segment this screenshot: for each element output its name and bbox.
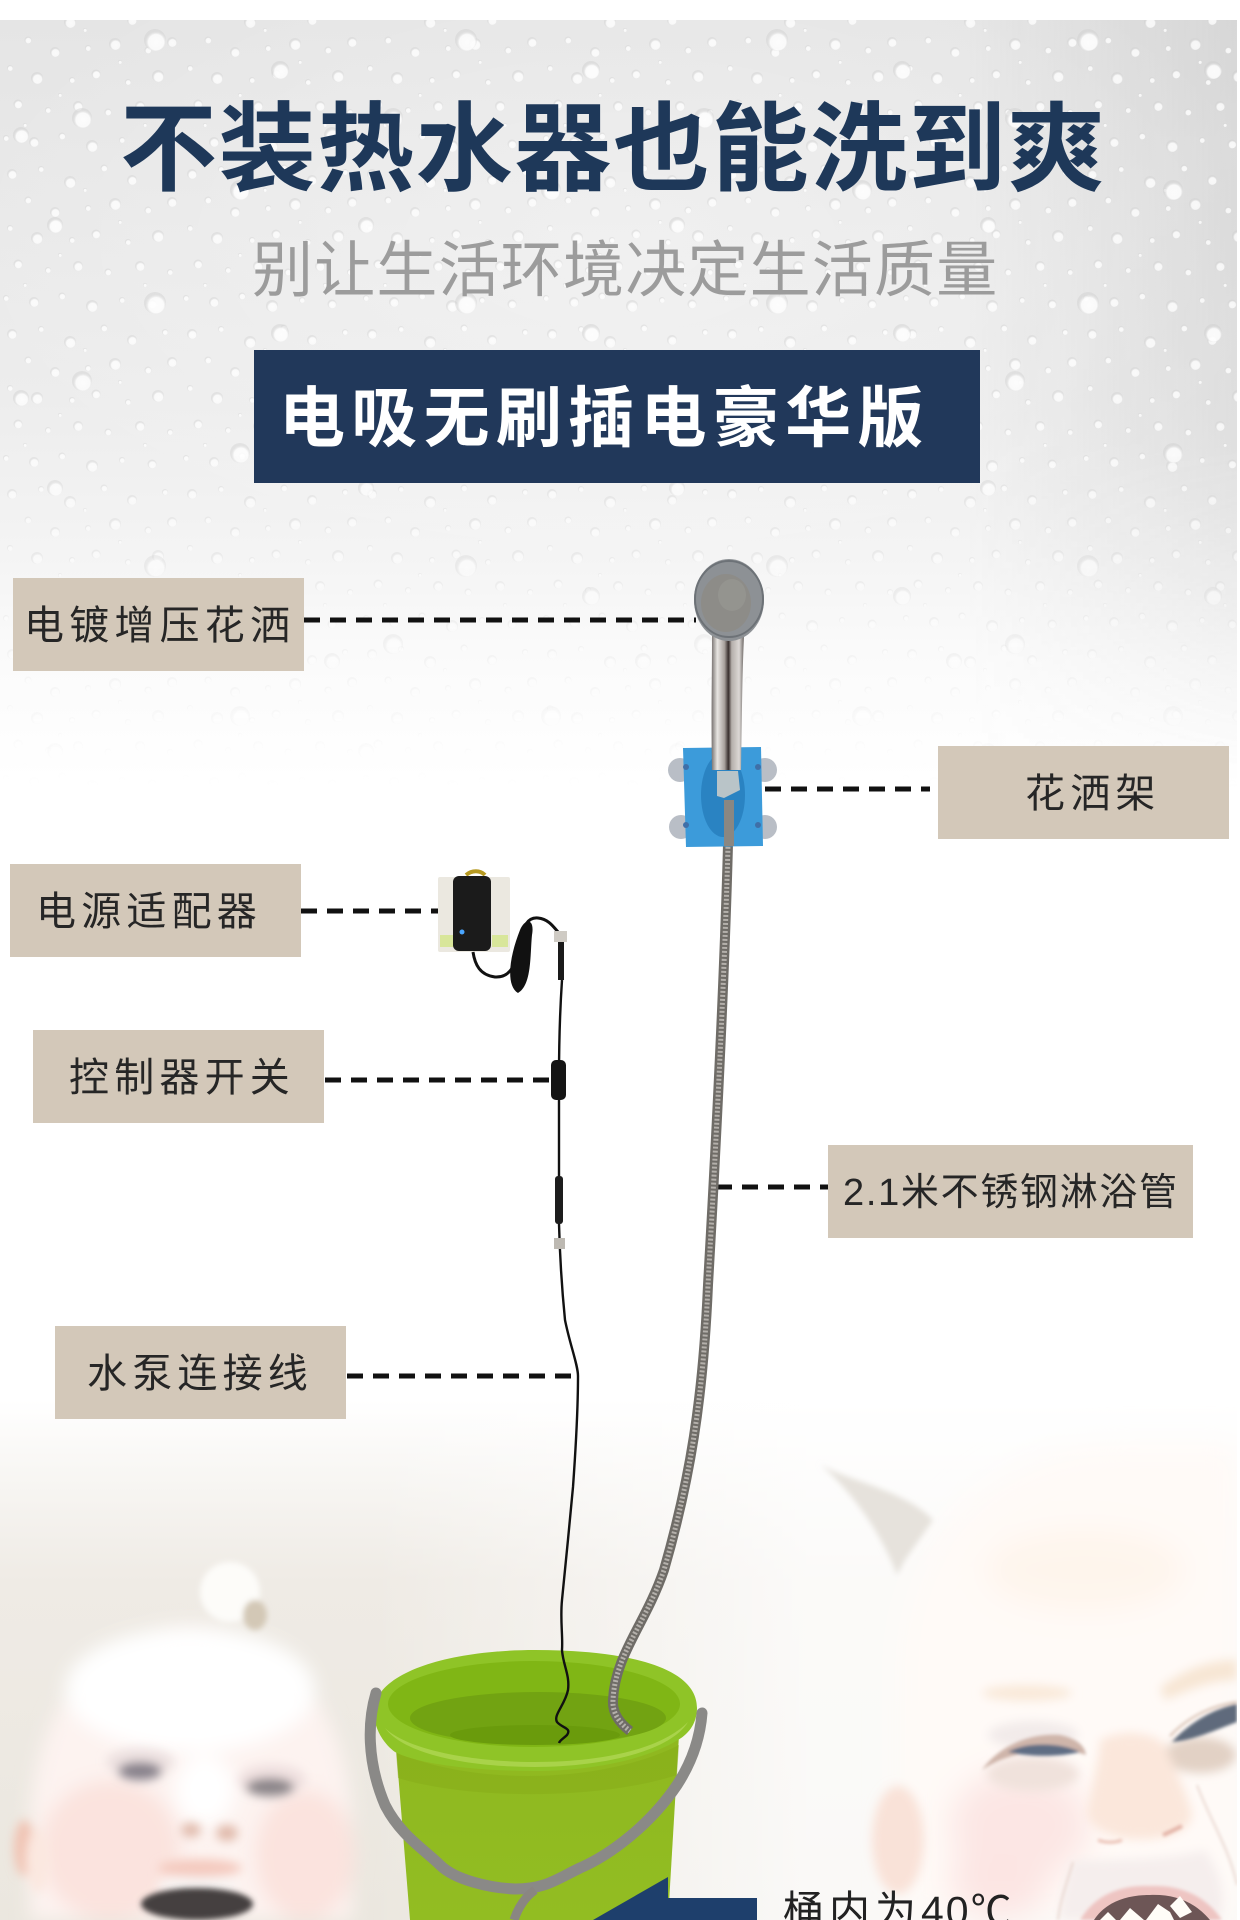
label: power adapter [10,864,301,957]
label: stainless hose [828,1145,1193,1238]
label: controller switch [33,1030,324,1123]
icon: control cable with switch [551,980,578,1743]
label: shower holder [938,746,1229,839]
label: stainless hose: 2.1米不锈钢淋浴管 [843,1172,1179,1214]
banner [254,350,980,483]
icon: shower head [694,559,764,770]
icon: bucket [370,1650,757,1920]
icon: power adapter [438,871,567,993]
title: 不装热水器也能洗到爽 [120,95,1106,204]
icon: shower holder [668,747,777,847]
label: controller switch: 控制器开关 [69,1056,295,1100]
label: electroplated shower head: 电镀增压花洒 [24,604,295,648]
label: pump cable: 水泵连接线 [87,1352,313,1396]
leader lines [301,620,930,1376]
blue corner of bucket graphic [593,1877,757,1920]
banner text: 电吸无刷插电豪华版 [279,381,930,455]
label: power adapter: 电源适配器 [36,890,262,934]
bucket handle [370,1693,702,1889]
label: electroplated shower head [13,578,304,671]
subtitle: 别让生活环境决定生活质量 [252,236,998,304]
baby left [30,1625,355,1920]
label: shower holder: 花洒架 [1025,772,1161,816]
icon: stainless steel hose [514,803,729,1920]
label: pump cable [55,1326,346,1419]
baby right [948,1527,1174,1918]
